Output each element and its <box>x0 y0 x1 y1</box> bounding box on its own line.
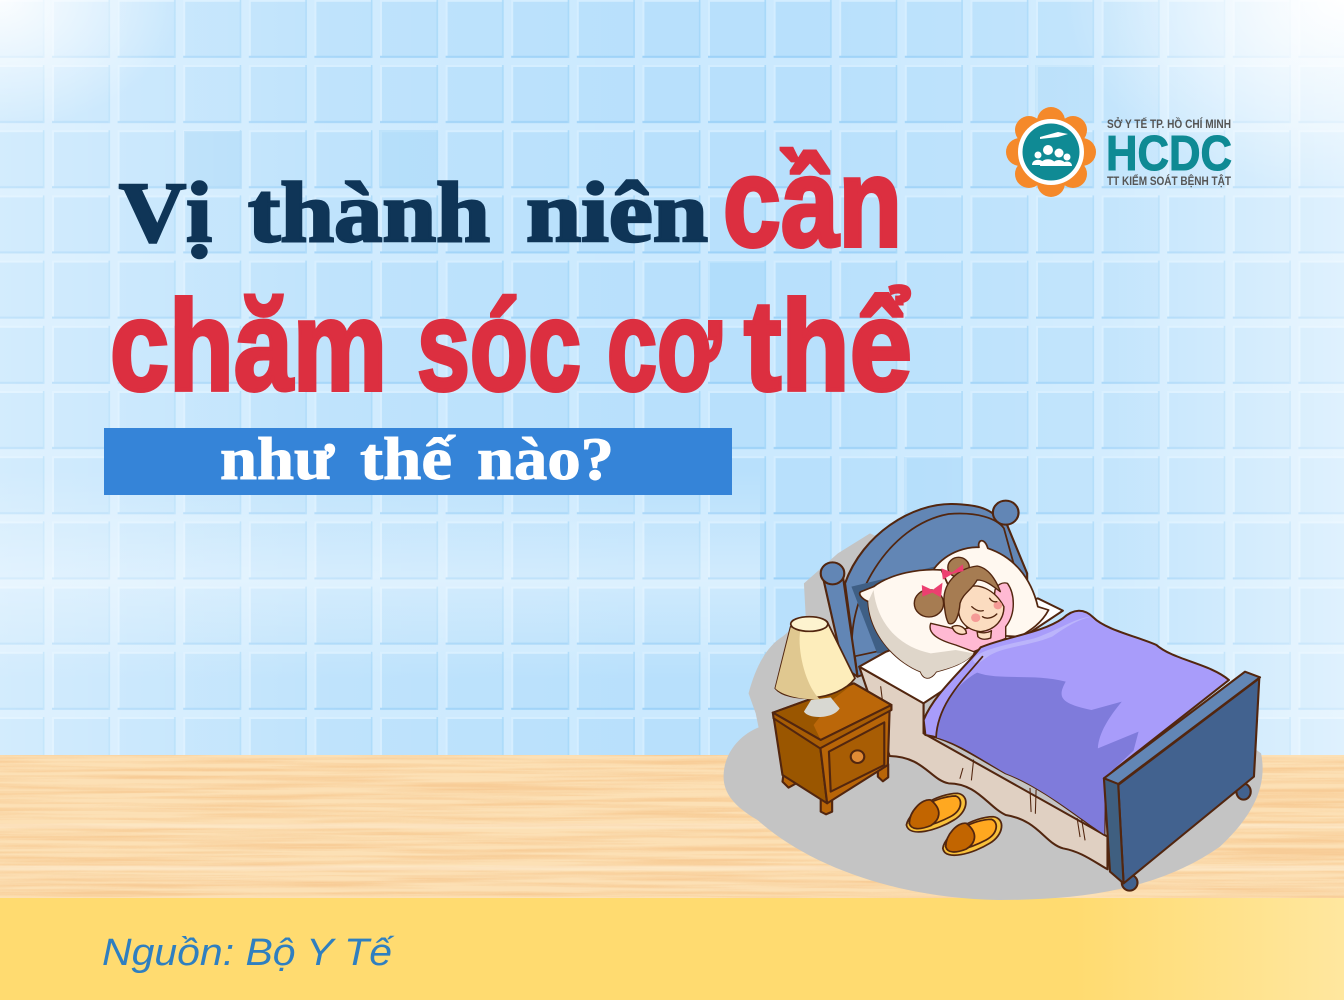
background: wooden floor <box>0 755 1344 898</box>
subtitle bar <box>104 428 732 495</box>
title line 1: dark serif <box>119 164 708 260</box>
title line 1: dark serif: thành <box>248 164 490 260</box>
source credit: Nguồn: Bộ Y Tế <box>102 932 395 974</box>
girl <box>914 557 1013 652</box>
background: blue tiled wall <box>0 0 1344 756</box>
subtitle text <box>220 426 614 492</box>
title block <box>104 132 912 495</box>
logo text: department: SỞ Y TẾ TP. HỒ CHÍ MINH <box>1107 118 1231 131</box>
slippers <box>906 793 1002 855</box>
title line 2: chăm sóc cơ thể <box>110 275 912 418</box>
subtitle text: nào? <box>477 426 614 492</box>
title line 2: chăm sóc cơ thể: sóc <box>417 275 581 418</box>
slipper left <box>906 793 966 832</box>
illustration: girl sleeping in bed <box>724 501 1263 900</box>
title word: cần: cần <box>723 132 902 273</box>
logo text: HCDC: HCDC <box>1106 127 1232 181</box>
title line 1: dark serif: niên <box>526 164 708 260</box>
pillows <box>860 541 1049 678</box>
nightstand <box>773 683 891 814</box>
blanket <box>924 611 1229 835</box>
title line 2: chăm sóc cơ thể: thể <box>744 275 912 418</box>
footer band <box>0 898 1344 1000</box>
title line 2: chăm sóc cơ thể: cơ <box>607 275 721 418</box>
logo: HCDC <box>1006 107 1232 197</box>
logo text: center name: TT KIỂM SOÁT BỆNH TẬT <box>1107 175 1231 188</box>
footboard <box>1104 672 1260 891</box>
subtitle text: thế <box>360 426 456 492</box>
mattress and bed skirt <box>859 598 1107 869</box>
headboard <box>821 501 1027 677</box>
lamp <box>775 617 855 717</box>
title line 1: dark serif: Vị <box>119 164 212 260</box>
floor and wall shadow <box>724 533 1263 900</box>
slipper right <box>943 817 1002 855</box>
icon: orange ring emblem <box>1006 107 1096 197</box>
title line 2: chăm sóc cơ thể: chăm <box>110 275 387 418</box>
subtitle text: như <box>220 426 335 492</box>
